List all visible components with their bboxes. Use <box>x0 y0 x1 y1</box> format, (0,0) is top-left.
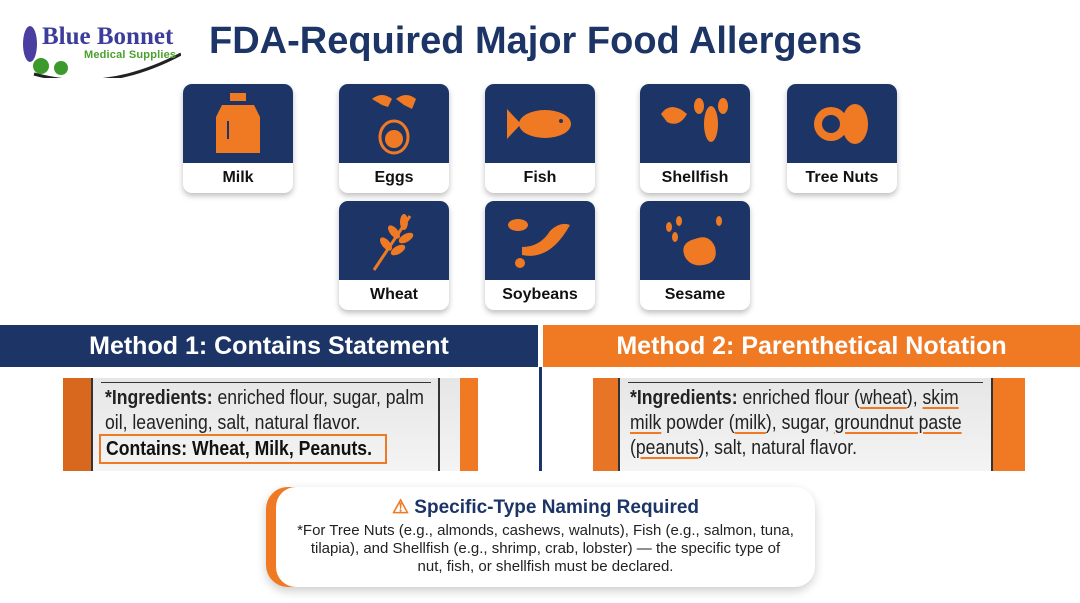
card: fish <box>485 84 595 193</box>
label: method 2: *Ingredients: enriched flour (wheat), skim <box>630 387 959 409</box>
label: method 1: *Ingredients: enriched flour, sugar, palm <box>105 387 424 409</box>
card: wheat: Wheat <box>370 286 418 303</box>
card: tree nuts <box>787 84 897 193</box>
callout text: tilapia), and Shellfish (e.g., shrimp, crab, lobster) — the specific type of <box>311 540 780 557</box>
label: method 2: (peanuts), salt, natural flavor. <box>630 437 857 459</box>
title: FDA-Required Major Food Allergens <box>209 20 862 62</box>
card: eggs <box>339 84 449 193</box>
logo: Blue Bonnet <box>42 23 174 50</box>
card: wheat <box>339 201 449 310</box>
card: eggs: Eggs <box>374 169 414 186</box>
logo <box>23 23 181 78</box>
card: milk <box>183 84 293 193</box>
callout heading: ⚠ Specific-Type Naming Required <box>392 497 699 518</box>
method 1 header: Method 1: Contains Statement <box>89 332 449 360</box>
label: method 1 <box>63 378 478 471</box>
card: shellfish <box>640 84 750 193</box>
card: fish: Fish <box>524 169 556 186</box>
callout text: *For Tree Nuts (e.g., almonds, cashews, walnuts), Fish (e.g., salmon, tuna, <box>297 522 794 539</box>
card: shellfish: Shellfish <box>662 169 728 186</box>
card: sesame <box>640 201 750 310</box>
card: milk: Milk <box>222 169 254 186</box>
callout text: nut, fish, or shellfish must be declared. <box>418 558 673 575</box>
method 2 header: Method 2: Parenthetical Notation <box>616 332 1007 360</box>
card: soybeans: Soybeans <box>502 286 578 303</box>
logo: Medical Supplies <box>84 49 176 61</box>
method 2 header <box>543 325 1080 367</box>
method 1 header <box>0 325 538 367</box>
callout: specific-type naming <box>266 487 815 587</box>
card: tree nuts: Tree Nuts <box>806 169 878 186</box>
card: sesame: Sesame <box>665 286 725 303</box>
label: method 2 <box>593 378 1025 471</box>
callout text <box>297 522 794 575</box>
label: method 1: oil, leavening, salt, natural flavor. <box>105 412 360 434</box>
label: method 1: Contains: Wheat, Milk, Peanuts. <box>106 438 372 460</box>
card: soybeans <box>485 201 595 310</box>
label: method 2: milk powder (milk), sugar, groundnut paste <box>630 412 962 434</box>
